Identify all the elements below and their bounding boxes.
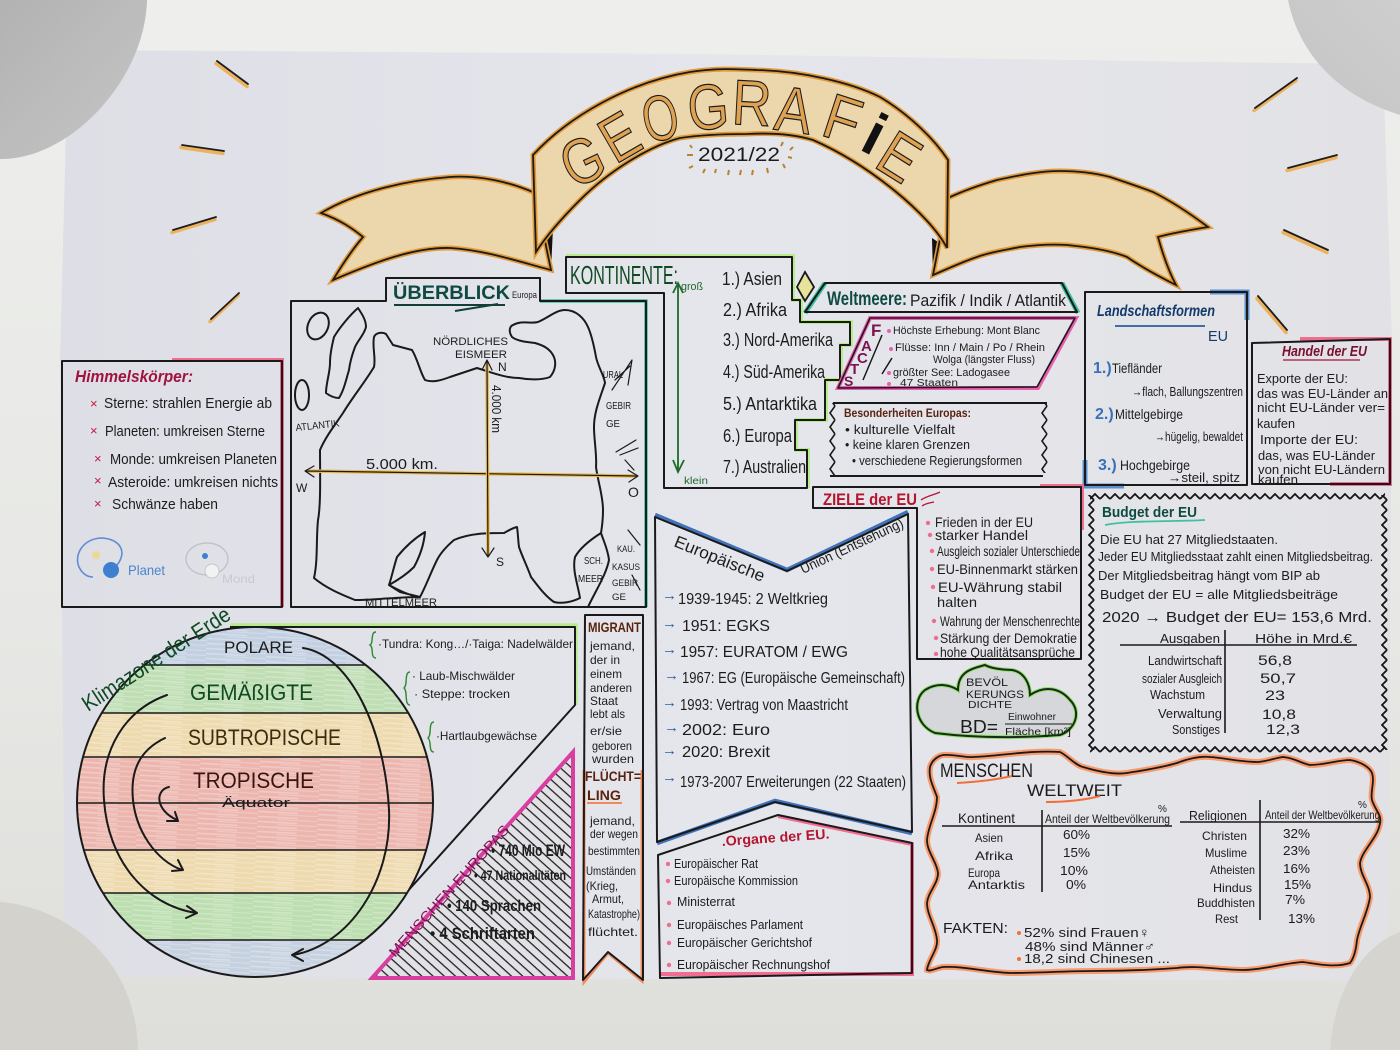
list: landforms: Hochgebirge bbox=[1120, 457, 1190, 473]
heading: Ueberblick Europa: ÜBERBLICK bbox=[393, 283, 510, 304]
map: Black Sea coast bbox=[588, 533, 609, 607]
title: G bbox=[685, 70, 732, 145]
list: celestial bodies: Planeten: umkreisen Sterne bbox=[105, 423, 265, 440]
list: timeline: 1957: EURATOM / EWG bbox=[680, 644, 848, 661]
list: EU goals: Frieden in der EU bbox=[935, 514, 1033, 530]
chart: globe with climate bands bbox=[70, 620, 440, 980]
text: exports imports: das was EU-Länder an bbox=[1257, 386, 1388, 401]
labels: climate zones: Äquator bbox=[222, 795, 291, 810]
text: exports imports: von nicht EU-Ländern bbox=[1258, 462, 1385, 477]
text: Migrant definition bbox=[589, 639, 635, 766]
map: labels: GE bbox=[606, 419, 620, 430]
map: labels: ATLANTIK bbox=[295, 418, 340, 434]
list: timeline: → bbox=[662, 587, 677, 604]
list: vegetation zones: ·Hartlaubgewächse bbox=[436, 729, 537, 743]
text: oceans: Pazifik / Indik / Atlantik bbox=[910, 291, 1066, 310]
list: facts: 47 Staaten bbox=[900, 378, 958, 389]
list: celestial bodies: × bbox=[90, 396, 98, 411]
heading: Ziele der EU: ZIELE der EU bbox=[823, 490, 917, 509]
panel: Menschen Europas triangle bbox=[372, 752, 573, 978]
heading: Facts: F bbox=[871, 321, 881, 340]
table: religions bbox=[1180, 800, 1380, 926]
list: landforms: Tiefländer bbox=[1112, 360, 1162, 376]
panel: Ziele der EU bbox=[813, 486, 1082, 660]
table: continents: 10% bbox=[1060, 863, 1088, 878]
list: continents: 3.) Nord-Amerika bbox=[723, 330, 834, 350]
text: Migrant definition: lebt als bbox=[590, 707, 625, 721]
panel: Budget der EU bbox=[1088, 493, 1388, 753]
map: labels: O bbox=[628, 484, 639, 500]
table: continents: 0% bbox=[1066, 877, 1086, 892]
heading: Facts bbox=[844, 321, 892, 389]
list: Europe facts: • 140 Sprachen bbox=[447, 898, 541, 915]
year rays bbox=[687, 142, 793, 175]
list: timeline: 1973-2007 Erweiterungen (22 Staaten) bbox=[680, 774, 906, 791]
list: EU goals: EU-Binnenmarkt stärken bbox=[937, 561, 1078, 577]
text: budget description bbox=[1098, 532, 1373, 626]
list: EU organs: Europäischer Rat bbox=[674, 856, 758, 871]
banner arch bbox=[533, 69, 948, 252]
table: budget expenses: Verwaltung bbox=[1158, 706, 1222, 721]
text: Migrant definition: der in bbox=[590, 653, 620, 667]
list: EU goals bbox=[926, 514, 1080, 660]
list: landforms: →flach, Ballungszentren bbox=[1132, 384, 1243, 399]
text: budget description: Die EU hat 27 Mitgliedstaaten. bbox=[1100, 532, 1278, 547]
list: timeline: 2020: Brexit bbox=[682, 744, 771, 761]
heading: Landschaftsformen: Landschaftsformen bbox=[1097, 303, 1215, 320]
table: religions: Christen bbox=[1202, 829, 1247, 843]
map: labels: GEBIR bbox=[612, 578, 638, 588]
table: religions: 15% bbox=[1284, 877, 1311, 892]
map: labels: 5.000 km. bbox=[366, 456, 438, 473]
heading: Bevoelkerungsdichte: KERUNGS bbox=[966, 689, 1024, 701]
list: timeline: 1939-1945: 2 Weltkrieg bbox=[678, 591, 828, 608]
text: Migrant definition: einem bbox=[590, 667, 622, 681]
title: A bbox=[771, 72, 817, 148]
map: labels: 4.000 km bbox=[489, 385, 504, 433]
banner right tail bbox=[933, 171, 1208, 285]
list: EU goals: Stärkung der Demokratie bbox=[940, 630, 1077, 646]
table: continents: Afrika bbox=[975, 849, 1013, 863]
map: labels: S bbox=[496, 555, 504, 569]
list: continents: 1.) Asien bbox=[722, 269, 782, 289]
text: facts: 52% sind Frauen♀ bbox=[1024, 925, 1150, 940]
heading: Europaeische Union: Union (Entstehung) bbox=[798, 515, 906, 577]
list: EU goals: halten bbox=[937, 594, 977, 610]
table: religions: 13% bbox=[1288, 911, 1315, 926]
banner left tail bbox=[321, 177, 551, 280]
diagram: moon orbit bbox=[186, 543, 255, 586]
text: exports imports: nicht EU-Länder ver= bbox=[1257, 400, 1385, 415]
heading: Facts: T bbox=[850, 361, 859, 378]
title: R bbox=[730, 66, 773, 140]
list: facts: größter See: Ladogasee bbox=[893, 367, 1010, 379]
heading: Fluechtling: FLÜCHT= bbox=[585, 768, 641, 784]
labels: climate zones bbox=[188, 638, 341, 810]
list: Besonderheiten: • kulturelle Vielfalt bbox=[845, 422, 955, 437]
list: continents: 5.) Antarktika bbox=[723, 394, 818, 414]
list: timeline: → bbox=[664, 667, 679, 684]
table: budget expenses: sozialer Ausgleich bbox=[1142, 671, 1222, 686]
heading: Fluechtling: LING bbox=[587, 787, 621, 803]
heading: Handel: Handel der EU bbox=[1282, 343, 1368, 360]
arrows: climate direction bbox=[104, 648, 389, 961]
labels: climate zones: GEMÄßIGTE bbox=[190, 680, 313, 705]
list: landforms: →hügelig, bewaldet bbox=[1155, 429, 1243, 444]
list: timeline: → bbox=[662, 694, 677, 711]
map: Europe coastline bbox=[314, 310, 605, 603]
arrow: size scale: klein bbox=[684, 476, 708, 487]
heading: Besonderheiten: Besonderheiten Europas: bbox=[844, 406, 971, 420]
heading: Budget: Budget der EU bbox=[1102, 504, 1197, 521]
table: religions: Religionen bbox=[1189, 808, 1247, 823]
list: timeline: 1951: EGKS bbox=[682, 618, 770, 635]
table: religions: 32% bbox=[1283, 826, 1310, 841]
heading: Bevoelkerungsdichte bbox=[966, 677, 1024, 711]
text: budget description: Budget der EU = alle Mitgliedsbeiträge bbox=[1100, 587, 1338, 602]
table: budget expenses: Landwirtschaft bbox=[1148, 653, 1222, 668]
text: exports imports: kaufen bbox=[1258, 472, 1298, 487]
map: islands bbox=[295, 308, 366, 410]
list: EU organs: Europäischer Rechnungshof bbox=[677, 957, 830, 972]
list: facts: Flüsse: Inn / Main / Po / Rhein bbox=[895, 342, 1045, 354]
map: labels: KASUS bbox=[612, 562, 640, 572]
panel: Handel der EU bbox=[1252, 339, 1390, 487]
map: labels: URAL bbox=[603, 370, 623, 381]
rays around title bbox=[172, 61, 1337, 332]
list: vegetation zones: · Laub-Mischwälder bbox=[412, 669, 515, 683]
panel: Europaeische Union timeline bbox=[655, 512, 912, 843]
formula: density: Fläche [km²] bbox=[1005, 727, 1071, 738]
text: Migrant definition: geboren bbox=[592, 739, 632, 753]
title: O bbox=[635, 80, 685, 157]
map: labels: N bbox=[498, 360, 507, 374]
text: Fluechtling definition bbox=[586, 814, 640, 939]
heading: Bevoelkerungsdichte: BEVÖL bbox=[966, 677, 1008, 689]
heading: Facts: A bbox=[861, 338, 872, 355]
heading: Weltmeere: Weltmeere: bbox=[827, 289, 907, 310]
map: labels: KAU. bbox=[617, 544, 635, 554]
list: continents: 7.) Australien bbox=[723, 457, 806, 477]
list: celestial bodies bbox=[90, 395, 278, 513]
table: religions: % bbox=[1358, 800, 1367, 811]
list: celestial bodies: × bbox=[90, 423, 98, 438]
table: budget expenses: Ausgaben bbox=[1160, 631, 1220, 646]
list: vegetation zones bbox=[370, 632, 573, 752]
text: Fluechtling definition: Umständen bbox=[586, 864, 636, 878]
table: budget expenses: 12,3 bbox=[1266, 721, 1300, 737]
map: north-south axis bbox=[482, 360, 494, 557]
map: labels: W bbox=[296, 481, 308, 495]
title: E bbox=[865, 117, 934, 197]
diagram: planet orbit bbox=[78, 538, 165, 578]
panel: Organe der EU bbox=[658, 815, 912, 978]
table: religions: Rest bbox=[1215, 912, 1239, 926]
map: labels: GE bbox=[612, 592, 626, 602]
map: west-east axis bbox=[305, 466, 638, 482]
list: landforms: 3.) bbox=[1098, 457, 1117, 474]
list: timeline: → bbox=[662, 641, 677, 658]
panel: Ueberblick Europa map bbox=[291, 278, 646, 609]
heading: Migrant: MIGRANT bbox=[588, 619, 641, 635]
panel: Bevoelkerungsdichte cloud bbox=[917, 665, 1076, 738]
list: Europe facts: • 4 Schriftarten bbox=[430, 924, 535, 943]
list: continents bbox=[722, 269, 834, 477]
list: EU goals: Ausgleich sozialer Unterschiede bbox=[937, 543, 1080, 559]
icon: diamond bbox=[797, 272, 814, 301]
text: budget description: 2020 → Budget der EU= 153,6 Mrd. bbox=[1102, 609, 1372, 626]
table: continents: Antarktis bbox=[968, 878, 1025, 892]
list: timeline: → bbox=[664, 719, 679, 736]
heading: Bevoelkerungsdichte: DICHTE bbox=[968, 700, 1012, 711]
heading: Landschaftsformen: EU bbox=[1208, 328, 1228, 345]
labels: climate zones: POLARE bbox=[224, 638, 293, 657]
text: Fluechtling definition: flüchtet. bbox=[588, 925, 638, 939]
text: exports imports: kaufen bbox=[1257, 416, 1295, 431]
text: Fluechtling definition: der wegen bbox=[590, 827, 638, 841]
list: vegetation zones: ·Tundra: Kong…/·Taiga: Nadelwälder bbox=[378, 637, 573, 651]
table: budget expenses bbox=[1120, 630, 1357, 737]
heading: Klimazonen: Klimazone der Erde bbox=[77, 602, 235, 716]
map: labels: SCH. bbox=[584, 556, 603, 567]
list: EU goals: starker Handel bbox=[935, 527, 1028, 543]
table: budget expenses: Sonstiges bbox=[1172, 722, 1220, 737]
list: vegetation zones: · Steppe: trocken bbox=[414, 687, 510, 701]
text: facts: 18,2 sind Chinesen ... bbox=[1024, 951, 1170, 966]
list: EU organs: Ministerrat bbox=[677, 894, 735, 909]
list: continents: 4.) Süd-Amerika bbox=[723, 362, 826, 382]
formula: density bbox=[960, 712, 1072, 738]
list: EU organs: Europäische Kommission bbox=[674, 873, 798, 888]
banner fold shadows bbox=[536, 228, 947, 275]
heading: Facts: C bbox=[857, 350, 868, 367]
panel: Landschaftsformen bbox=[1085, 292, 1247, 486]
table: religions: 16% bbox=[1283, 861, 1310, 876]
list: celestial bodies: Schwänze haben bbox=[112, 496, 218, 513]
year: 2021/22 bbox=[698, 145, 780, 166]
list: timeline: → bbox=[662, 769, 677, 786]
table: continents: Anteil der Weltbevölkerung bbox=[1045, 812, 1170, 826]
diagram: planet orbit: Planet bbox=[128, 562, 165, 578]
heading: Menschen Europas: MENSCHEN EUROPAS bbox=[385, 821, 512, 960]
table: religions: Hindus bbox=[1213, 881, 1252, 895]
list: celestial bodies: Sterne: strahlen Energie ab bbox=[104, 395, 272, 412]
table: budget expenses: 50,7 bbox=[1260, 670, 1296, 686]
text: exports imports: das, was EU-Länder bbox=[1258, 448, 1376, 463]
table: religions: Buddhisten bbox=[1197, 896, 1255, 910]
list: EU goals: hohe Qualitätsansprüche bbox=[940, 644, 1075, 660]
list: EU organs bbox=[666, 856, 830, 972]
diagram: moon orbit: Mond bbox=[222, 572, 255, 586]
heading: Fluechtling bbox=[585, 768, 641, 803]
text: facts bbox=[943, 920, 1170, 966]
table: continents: 60% bbox=[1063, 827, 1090, 842]
text: exports imports bbox=[1257, 371, 1388, 487]
text: facts: FAKTEN: bbox=[943, 920, 1008, 937]
table: continents: Kontinent bbox=[958, 810, 1015, 826]
arrow: size scale bbox=[673, 281, 708, 487]
list: celestial bodies: × bbox=[94, 473, 102, 488]
table: religions: 23% bbox=[1283, 843, 1310, 858]
panel: Menschen weltweit bbox=[927, 752, 1380, 973]
list: landforms: →steil, spitz bbox=[1168, 470, 1240, 485]
panel: Himmelskoerper bbox=[62, 360, 282, 607]
list: timeline: 1967: EG (Europäische Gemeinschaft) bbox=[682, 670, 905, 687]
heading: Menschen weltweit bbox=[940, 761, 1122, 802]
arrow: size scale: groß bbox=[681, 281, 703, 293]
title bbox=[549, 66, 934, 202]
map: labels: MEER bbox=[578, 574, 603, 585]
text: exports imports: Exporte der EU: bbox=[1257, 371, 1348, 386]
text: Fluechtling definition: Armut, bbox=[592, 892, 624, 906]
table: budget expenses: 56,8 bbox=[1258, 652, 1292, 668]
heading: Menschen weltweit: MENSCHEN bbox=[940, 761, 1033, 782]
text: Fluechtling definition: (Krieg, bbox=[586, 879, 618, 893]
title: E bbox=[587, 98, 653, 177]
list: Europe facts: • 47 Nationalitäten bbox=[474, 867, 566, 883]
list: EU goals: Wahrung der Menschenrechte bbox=[940, 613, 1080, 629]
list: Europe facts bbox=[430, 841, 566, 943]
text: exports imports: Importe der EU: bbox=[1260, 432, 1358, 447]
text: budget description: Der Mitgliedsbeitrag hängt vom BIP ab bbox=[1098, 568, 1320, 583]
list: Besonderheiten bbox=[845, 422, 1022, 468]
map: labels: MITTELMEER bbox=[365, 597, 437, 609]
list: landforms: Mittelgebirge bbox=[1115, 406, 1183, 422]
map: labels bbox=[295, 336, 640, 609]
title: G bbox=[549, 121, 616, 202]
list: EU goals: EU-Währung stabil bbox=[938, 579, 1062, 595]
list: landforms bbox=[1093, 360, 1243, 485]
list: Besonderheiten: • keine klaren Grenzen bbox=[845, 437, 970, 452]
text: Migrant definition: er/sie bbox=[590, 724, 622, 738]
table: budget expenses: 10,8 bbox=[1262, 706, 1296, 722]
table: continents: Asien bbox=[975, 831, 1003, 845]
table: continents: Europa bbox=[968, 866, 1000, 880]
list: celestial bodies: × bbox=[94, 496, 102, 511]
formula: density: BD= bbox=[960, 717, 998, 737]
text: Migrant definition: jemand, bbox=[589, 639, 635, 653]
text: Migrant definition: wurden bbox=[591, 752, 634, 766]
list: timeline: 1993: Vertrag von Maastricht bbox=[680, 697, 848, 714]
list: facts bbox=[887, 325, 1045, 389]
heading: Ueberblick Europa: Europa bbox=[512, 290, 537, 300]
table: continents bbox=[942, 804, 1172, 892]
list: continents: 2.) Afrika bbox=[723, 300, 788, 320]
list: timeline: 2002: Euro bbox=[682, 722, 770, 739]
list: celestial bodies: × bbox=[94, 451, 102, 466]
map: labels: EISMEER bbox=[455, 349, 507, 361]
list: facts: Wolga (längster Fluss) bbox=[933, 354, 1035, 366]
list: Besonderheiten: • verschiedene Regierungsformen bbox=[852, 453, 1022, 468]
text: Migrant definition: anderen bbox=[590, 681, 632, 695]
table: budget expenses: 23 bbox=[1265, 687, 1285, 703]
heading: Europaeische Union bbox=[672, 515, 906, 586]
map: labels: GEBIR bbox=[606, 401, 631, 412]
table: continents: % bbox=[1158, 804, 1167, 815]
heading: Ueberblick Europa bbox=[393, 283, 537, 311]
text: Migrant definition: Staat bbox=[590, 694, 619, 708]
panel: Besonderheiten Europas bbox=[829, 403, 1048, 477]
list: timeline bbox=[662, 587, 906, 791]
text: Fluechtling definition: Katastrophe) bbox=[588, 907, 640, 921]
heading: Facts: S bbox=[844, 373, 853, 389]
map: labels: NÖRDLICHES bbox=[433, 336, 508, 348]
list: facts: Höchste Erhebung: Mont Blanc bbox=[893, 325, 1040, 337]
labels: climate zones: TROPISCHE bbox=[193, 768, 314, 793]
heading: Kontinente: KONTINENTE: bbox=[570, 260, 678, 290]
formula: density: Einwohner bbox=[1008, 712, 1057, 723]
table: religions: Atheisten bbox=[1210, 863, 1255, 877]
title: F bbox=[815, 79, 870, 158]
panel: Klimazonen bbox=[70, 602, 576, 980]
text: Fluechtling definition: bestimmten bbox=[588, 844, 640, 858]
panel: Facts bbox=[838, 318, 1076, 389]
list: EU organs: Europäisches Parlament bbox=[677, 917, 803, 932]
list: timeline: → bbox=[662, 615, 677, 632]
heading: Himmelskoerper: Himmelskörper: bbox=[75, 367, 193, 386]
list: timeline: → bbox=[662, 742, 677, 759]
panel: Migrant Fluechtling bbox=[583, 615, 643, 982]
table: religions: Muslime bbox=[1205, 846, 1247, 860]
table: continents: 15% bbox=[1063, 845, 1090, 860]
list: EU organs: Europäischer Gerichtshof bbox=[677, 935, 812, 950]
panel: Kontinente bbox=[566, 256, 851, 488]
heading: Organe: .Organe der EU. bbox=[721, 825, 830, 849]
title banner bbox=[321, 66, 1208, 285]
labels: climate zones: SUBTROPISCHE bbox=[188, 725, 341, 750]
list: celestial bodies: Asteroide: umkreisen nichts bbox=[108, 474, 278, 491]
list: celestial bodies: Monde: umkreisen Planeten bbox=[110, 451, 277, 468]
text: Fluechtling definition: jemand, bbox=[589, 814, 635, 828]
table: budget expenses: Wachstum bbox=[1150, 687, 1205, 702]
table: religions: 7% bbox=[1285, 892, 1305, 907]
title: i bbox=[852, 101, 897, 168]
list: Europe facts: • 740 Mio EW bbox=[491, 841, 566, 860]
heading: Europaeische Union: Europäische bbox=[672, 532, 768, 586]
heading: Landschaftsformen bbox=[1097, 303, 1228, 345]
panel: Weltmeere bbox=[805, 283, 1078, 313]
list: landforms: 1.) bbox=[1093, 360, 1112, 377]
heading: Menschen weltweit: WELTWEIT bbox=[1027, 781, 1122, 800]
text: budget description: Jeder EU Mitgliedsstaat zahlt einen Mitgliedsbeitrag. bbox=[1098, 549, 1373, 564]
list: continents: 6.) Europa bbox=[723, 426, 793, 446]
table: budget expenses: Höhe in Mrd.€ bbox=[1255, 631, 1353, 646]
list: landforms: 2.) bbox=[1095, 406, 1114, 423]
text: facts: 48% sind Männer♂ bbox=[1025, 939, 1155, 954]
